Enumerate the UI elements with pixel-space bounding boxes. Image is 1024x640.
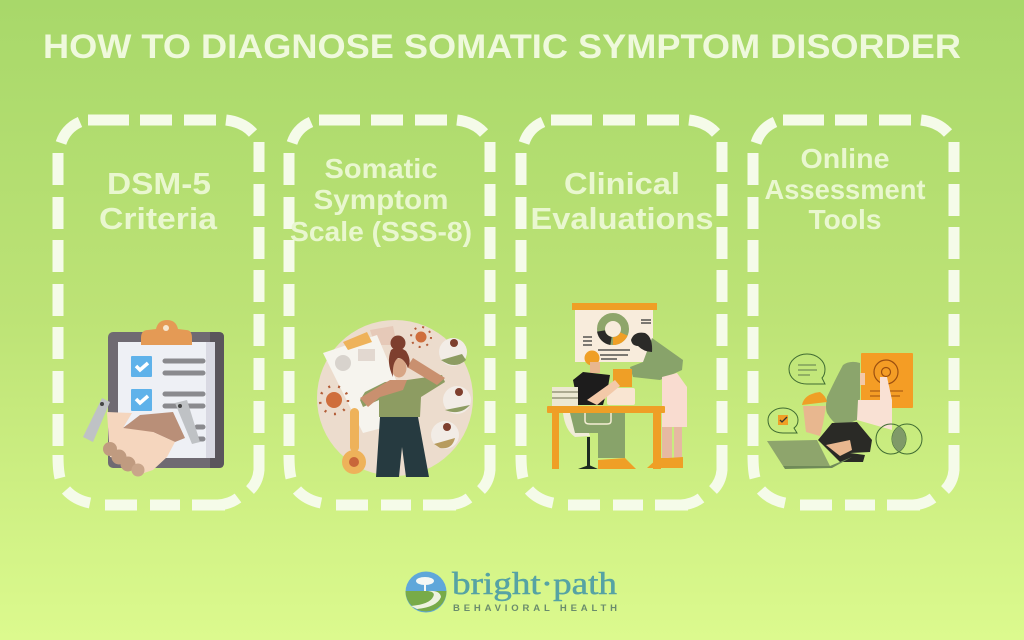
heading: Somatic Symptom Scale (SSS-8): Somatic <box>324 153 438 184</box>
tagline: BEHAVIORAL HEALTH <box>453 603 617 614</box>
heading: Online Assessment Tools: Tools <box>808 204 882 235</box>
panel: Somatic Symptom Scale <box>289 120 490 505</box>
title: HOW TO DIAGNOSE SOMATIC SYMPTOM DISORDER <box>43 28 961 66</box>
heading: DSM-5 Criteria: DSM-5 <box>107 166 211 201</box>
heading: Somatic Symptom Scale (SSS-8): Symptom <box>314 184 448 215</box>
wordmark: bright·path <box>452 565 617 601</box>
heading: Online Assessment Tools: Online <box>800 143 890 174</box>
icon: clipboard and handshake <box>83 320 224 476</box>
logo: Bright Path Behavioral Health <box>406 565 617 614</box>
heading: Online Assessment Tools: Assessment <box>764 174 926 205</box>
panel: DSM-5 criteria <box>58 120 259 505</box>
panel: Online Assessment Tools <box>753 120 954 505</box>
heading: Somatic Symptom Scale (SSS-8): Scale (SSS-8) <box>290 216 472 247</box>
illustration: online tools <box>767 353 922 469</box>
heading: DSM-5 Criteria: Criteria <box>99 201 218 236</box>
heading: Clinical Evaluations: Evaluations <box>530 201 714 236</box>
heading: Clinical Evaluations: Clinical <box>564 166 680 201</box>
illustration: woman with symptoms <box>317 320 473 477</box>
icon: tree and path <box>406 572 446 612</box>
illustration: two people at desk <box>547 303 687 469</box>
panel: Clinical Evaluations <box>521 120 722 505</box>
